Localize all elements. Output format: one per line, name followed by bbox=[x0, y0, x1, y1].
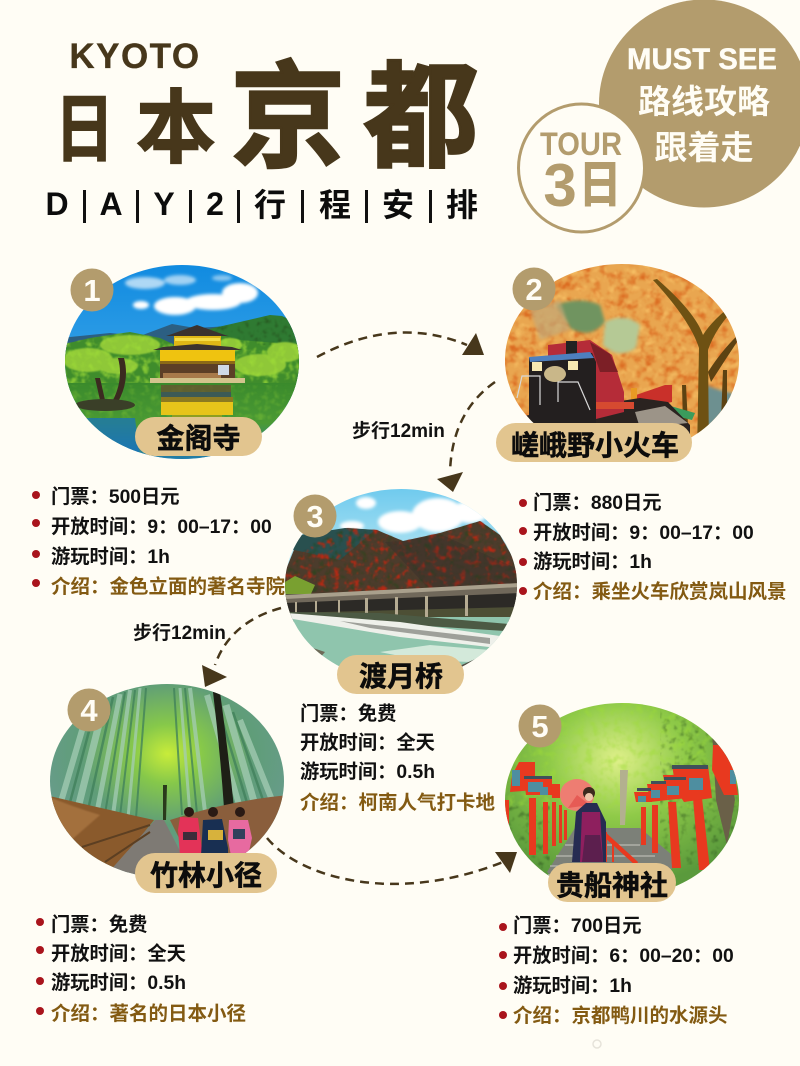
info list: stop 1: 门票：500日元 bbox=[51, 486, 180, 508]
photo: red lantern stairway bbox=[505, 703, 739, 886]
badge: must see route guide: 跟着走 bbox=[654, 129, 754, 166]
name label bbox=[496, 423, 692, 462]
number badge 4: 4 bbox=[80, 693, 98, 728]
info list: stop 2: 门票：880日元 bbox=[533, 492, 662, 514]
name label: 贵船神社 bbox=[556, 870, 668, 901]
info list: stop 4: 门票：免费 bbox=[51, 913, 147, 936]
arrow: stop 3 to stop 4 bbox=[202, 608, 281, 687]
stop 3: Togetsukyo bridge panel bbox=[280, 485, 525, 694]
photo: bamboo grove and kimono walkers bbox=[50, 684, 284, 874]
info list: stop 5: 门票：700日元 bbox=[513, 915, 642, 937]
name label: 嵯峨野小火车 bbox=[511, 430, 679, 461]
info list: stop 3: 开放时间：全天 bbox=[300, 731, 435, 754]
badge: must see route guide: 路线攻略 bbox=[638, 83, 770, 120]
photo: golden pavilion bbox=[60, 260, 305, 465]
badge: tour 3 days bbox=[518, 104, 644, 232]
subtitle: DAY2 行程安排: A bbox=[99, 186, 123, 222]
number badge 2: 2 bbox=[525, 272, 543, 307]
number badge 1: 1 bbox=[83, 273, 101, 308]
badge: must see route guide: MUST SEE bbox=[627, 43, 777, 76]
number badge 3: 3 bbox=[306, 499, 324, 534]
photo: scenic train in autumn forest bbox=[505, 264, 739, 438]
stop 2: Sagano train panel bbox=[496, 260, 745, 465]
arrow: stop 4 to stop 5 bbox=[267, 838, 517, 884]
title: 京都: 都 bbox=[363, 54, 479, 182]
number badge 5: 5 bbox=[531, 709, 549, 744]
info list: stop 5 bbox=[499, 915, 734, 1027]
title: 京都 bbox=[230, 54, 479, 182]
faint watermark mark bbox=[593, 1040, 601, 1048]
info list: stop 4: 开放时间：全天 bbox=[51, 942, 186, 965]
name label: 渡月桥 bbox=[359, 661, 443, 692]
info list: stop 1: 游玩时间：1h bbox=[51, 545, 170, 568]
info list: stop 4: 介绍：著名的日本小径 bbox=[51, 1003, 246, 1025]
badge: tour 3 days: 3 bbox=[543, 152, 577, 219]
name label bbox=[135, 853, 277, 893]
name label bbox=[548, 863, 676, 902]
info list: stop 4 bbox=[36, 913, 246, 1025]
stop 4: bamboo path panel bbox=[45, 680, 290, 893]
walking time label: stop 3 to 4: 步行12min bbox=[133, 622, 226, 644]
badge: must see route guide bbox=[599, 0, 800, 208]
name label bbox=[135, 417, 262, 456]
info list: stop 4: 游玩时间：0.5h bbox=[51, 971, 186, 994]
info list: stop 2: 介绍：乘坐火车欣赏岚山风景 bbox=[533, 580, 787, 603]
subtitle: DAY2 行程安排: 程 bbox=[319, 187, 351, 223]
number badge 3 bbox=[294, 494, 336, 538]
photo: bridge and autumn hills bbox=[285, 489, 517, 667]
info list: stop 3: 游玩时间：0.5h bbox=[300, 760, 435, 783]
title: 日本: 本 bbox=[136, 84, 216, 173]
title: 日本 bbox=[55, 84, 216, 173]
name label bbox=[337, 655, 464, 694]
subtitle: DAY2 行程安排: 安 bbox=[382, 187, 414, 223]
stop 5: Kifune shrine panel bbox=[500, 698, 745, 903]
number badge 4 bbox=[68, 688, 110, 732]
info list: stop 5: 介绍：京都鸭川的水源头 bbox=[513, 1004, 728, 1027]
subtitle: DAY2 行程安排: 排 bbox=[446, 187, 478, 223]
info list: stop 2: 游玩时间：1h bbox=[533, 550, 652, 573]
KYOTO heading: KYOTO bbox=[69, 37, 201, 76]
info list: stop 3: 介绍：柯南人气打卡地 bbox=[300, 792, 496, 814]
subtitle: DAY2 行程安排 bbox=[45, 186, 478, 223]
name label: 竹林小径 bbox=[150, 860, 262, 891]
subtitle: DAY2 行程安排: 2 bbox=[206, 186, 224, 222]
name label: 金阁寺 bbox=[156, 423, 241, 454]
walking time label: stop 2 to 3: 步行12min bbox=[352, 420, 445, 442]
stop 1: Kinkaku-ji panel bbox=[60, 260, 305, 465]
arrow: stop 2 to stop 3 bbox=[437, 382, 495, 492]
badge: tour 3 days: TOUR bbox=[540, 126, 622, 162]
header title block bbox=[45, 37, 479, 223]
subtitle: DAY2 行程安排: 行 bbox=[254, 187, 286, 223]
info list: stop 1: 开放时间：9：00–17：00 bbox=[51, 516, 272, 538]
info list: stop 3: 门票：免费 bbox=[300, 702, 396, 725]
info list: stop 5: 游玩时间：1h bbox=[513, 974, 632, 997]
title: 京都: 京 bbox=[230, 54, 346, 182]
badge: tour 3 days: 日 bbox=[579, 157, 621, 213]
info list: stop 5: 开放时间：6：00–20：00 bbox=[513, 945, 734, 967]
number badge 5 bbox=[518, 704, 562, 748]
info list: stop 2 bbox=[519, 492, 787, 603]
subtitle: DAY2 行程安排: D bbox=[45, 186, 69, 222]
number badge 2 bbox=[512, 268, 556, 310]
info list: stop 2: 开放时间：9：00–17：00 bbox=[533, 522, 754, 544]
subtitle: DAY2 行程安排: Y bbox=[153, 186, 175, 222]
info list: stop 1: 介绍：金色立面的著名寺院 bbox=[51, 575, 286, 598]
info list: stop 3 bbox=[300, 702, 496, 814]
title: 日本: 日 bbox=[55, 89, 114, 172]
number badge 1 bbox=[70, 268, 114, 312]
arrow: stop 1 to stop 2 bbox=[317, 332, 484, 357]
info list: stop 1 bbox=[32, 486, 286, 598]
